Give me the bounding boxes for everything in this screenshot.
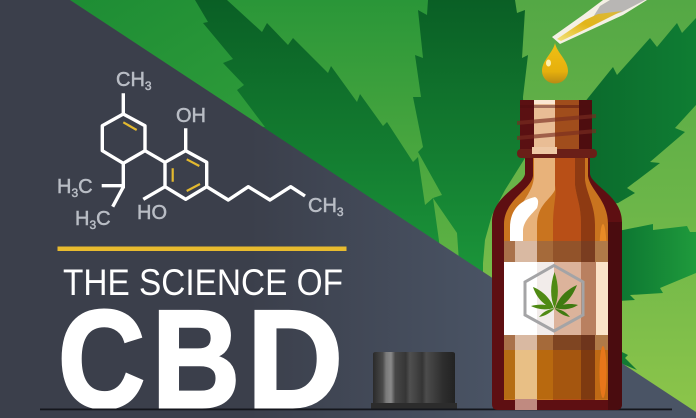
bottle neck and threads: [517, 100, 597, 158]
bottle body: [490, 150, 625, 412]
cannabis leaf: right upper finger: [580, 18, 696, 210]
band above label: [504, 241, 608, 262]
molecule labels: 3: [337, 205, 344, 219]
ground line: [40, 408, 672, 410]
heading: the science of: THE SCIENCE OF: [63, 262, 343, 303]
oil drop: [542, 43, 568, 84]
molecule labels: 3: [71, 186, 78, 200]
molecule labels: HO: [137, 202, 167, 224]
molecule labels: CH: [116, 69, 145, 91]
label hexagon: [525, 266, 583, 331]
cap body: [373, 352, 455, 404]
dropper grey shade: [590, 0, 645, 22]
molecule labels: H: [75, 208, 89, 230]
liquid: [504, 346, 608, 399]
molecule labels: OH: [176, 105, 206, 127]
cannabis leaf: dark centre finger: [185, 0, 528, 290]
heading: CBD: [62, 308, 339, 408]
dropper oil: [557, 11, 622, 41]
molecule labels: 3: [145, 79, 152, 93]
label cannabis leaf: [531, 272, 578, 317]
drop highlight: [546, 60, 551, 66]
amber bottle: [490, 100, 625, 412]
cannabis leaf: small lower tip: [618, 350, 637, 370]
drop shape: [542, 43, 568, 84]
molecule double bonds: [123, 122, 200, 191]
dropper glass: [552, 0, 647, 44]
glass highlight: [510, 197, 538, 241]
dropper: [552, 0, 647, 44]
yellow divider: [58, 246, 346, 251]
cannabis leaf: right lower finger: [618, 224, 696, 301]
molecule labels: 3: [89, 218, 96, 232]
bottle label: [504, 262, 608, 335]
molecule labels: [57, 69, 344, 232]
molecule bonds: [102, 93, 305, 207]
cannabis leaf: mid green left finger: [60, 0, 265, 127]
label paper: [504, 262, 537, 335]
cannabis leaf: light centre finger: [227, 0, 459, 262]
molecule diagram: [57, 69, 344, 232]
molecule labels: H: [57, 176, 71, 198]
molecule labels: CH: [308, 195, 337, 217]
molecule labels: C: [78, 176, 93, 198]
band below label: [504, 335, 608, 350]
bottle cap: [371, 352, 457, 409]
cap flange: [371, 403, 457, 409]
molecule labels: C: [96, 208, 111, 230]
